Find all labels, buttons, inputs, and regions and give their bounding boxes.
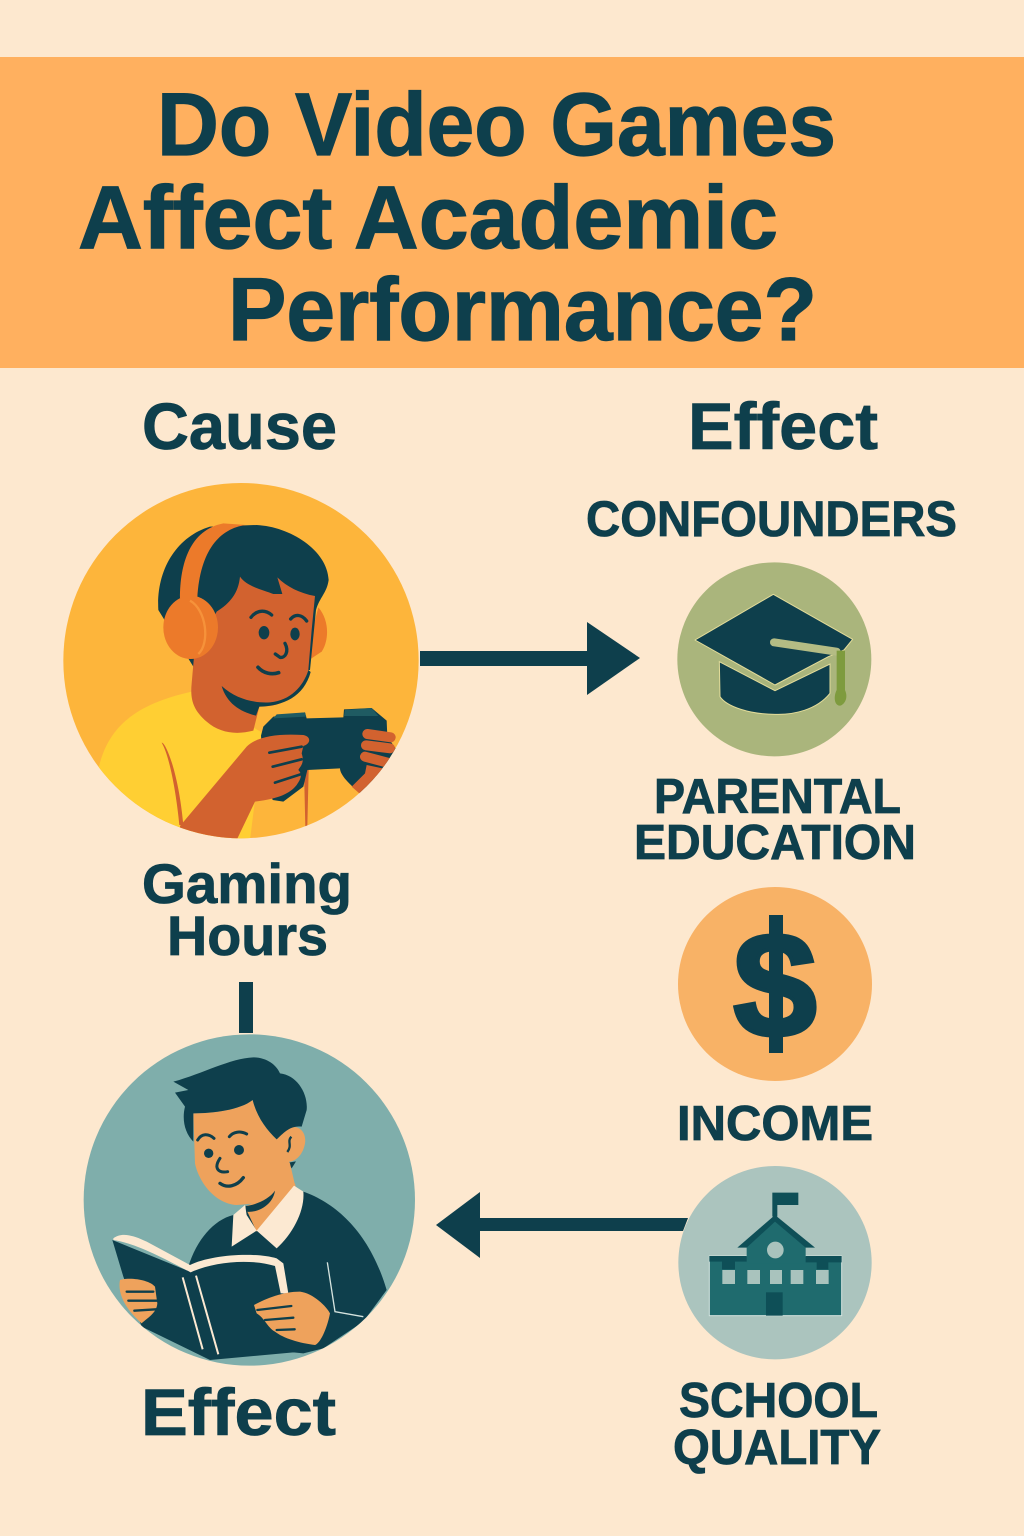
label: school quality	[673, 1374, 881, 1475]
label: gaming hours	[142, 852, 352, 967]
label: effect: Effect	[141, 1375, 336, 1449]
icon: dollar	[678, 887, 872, 1081]
heading: confounders: CONFOUNDERS	[586, 491, 957, 547]
icon: dollar: $	[733, 901, 817, 1069]
facial features	[251, 611, 307, 674]
connector arrow: school quality to effect	[436, 1192, 688, 1258]
ear cup left	[163, 596, 218, 659]
label: school quality: QUALITY	[673, 1421, 881, 1475]
right hand	[352, 765, 382, 794]
door	[766, 1292, 783, 1316]
roof	[737, 1215, 815, 1248]
building	[709, 1256, 842, 1316]
hair	[158, 525, 329, 670]
cap base	[719, 662, 830, 714]
windows	[722, 1270, 829, 1284]
heading: effect: Effect	[688, 389, 878, 463]
label: gaming hours: Gaming	[142, 852, 352, 915]
title banner	[0, 57, 1024, 368]
title: Affect Academic	[78, 167, 778, 267]
ear cup right	[310, 607, 327, 659]
icon: student reading	[84, 1034, 415, 1366]
tassel cord	[774, 642, 837, 652]
sweater	[170, 1192, 387, 1353]
flag	[772, 1193, 798, 1217]
game controller	[261, 708, 397, 802]
facial features	[198, 1132, 247, 1186]
title: Do Video Games	[157, 74, 836, 174]
title: Performance?	[228, 259, 817, 359]
icon: graduation cap	[677, 562, 871, 756]
collar	[232, 1186, 303, 1248]
ear	[276, 1127, 306, 1162]
book	[112, 1240, 302, 1360]
label: parental education: PARENTAL	[654, 770, 901, 824]
face	[193, 1100, 295, 1205]
jaw shadow	[222, 670, 311, 716]
heading: cause: Cause	[142, 389, 337, 463]
icon: school	[678, 1166, 872, 1359]
title	[78, 74, 836, 359]
hair	[173, 1057, 307, 1142]
label: parental education: EDUCATION	[634, 816, 916, 870]
face and neck	[191, 577, 315, 733]
icon: gamer with headphones	[63, 483, 419, 840]
cap board	[695, 594, 853, 685]
left hand	[119, 1279, 157, 1323]
label: income: INCOME	[677, 1097, 873, 1151]
headband	[180, 523, 246, 598]
jaw shadow	[246, 1191, 275, 1212]
neck	[245, 1183, 297, 1232]
connector arrow: cause to confounders	[420, 622, 640, 695]
right hand	[254, 1292, 330, 1345]
label: school quality: SCHOOL	[679, 1374, 878, 1428]
shirt	[98, 692, 262, 838]
left hand and arm	[180, 735, 309, 840]
connector line: gaming hours to effect	[239, 982, 253, 1033]
label: parental education	[634, 770, 916, 870]
label: gaming hours: Hours	[167, 904, 328, 967]
